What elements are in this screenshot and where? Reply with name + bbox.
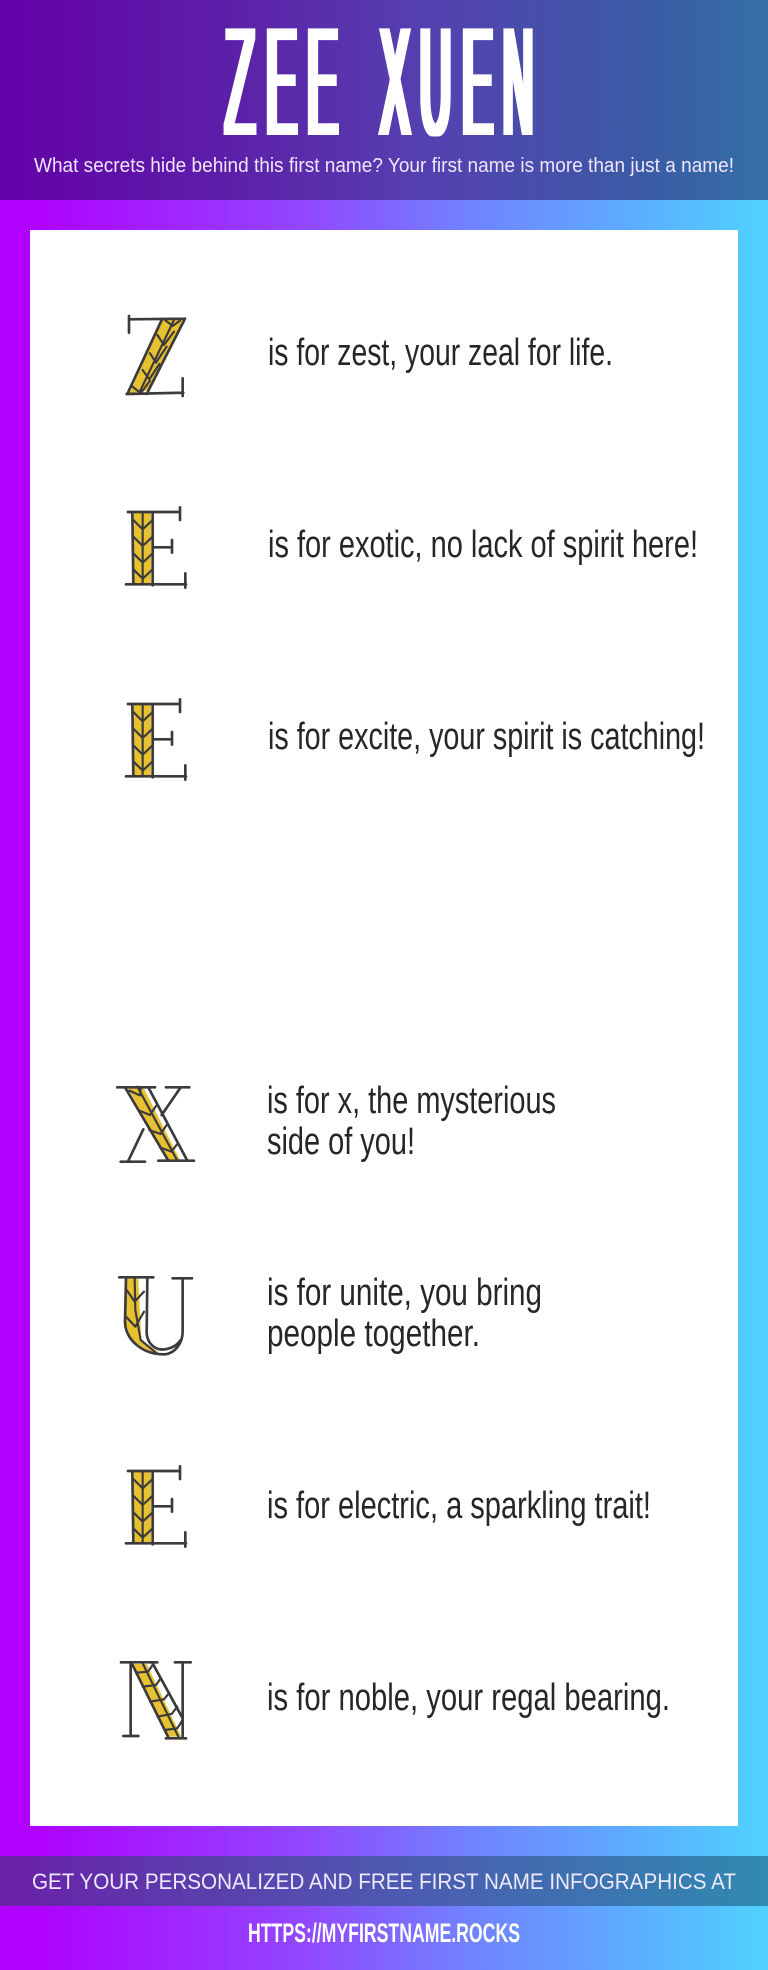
icon: wheat letter E xyxy=(126,699,186,780)
title: E xyxy=(462,0,493,168)
panel: letters card xyxy=(30,230,738,1826)
text: X lines xyxy=(267,1080,556,1163)
title: E xyxy=(266,0,297,168)
text: E line: is for electric, a sparkling trait! xyxy=(267,1485,651,1527)
icon: wheat letter X xyxy=(117,1087,194,1162)
icon: wheat letter U xyxy=(119,1277,192,1354)
url: HTTPS://MYFIRSTNAME.ROCKS xyxy=(248,1918,520,1948)
text: U lines: is for unite, you bring xyxy=(267,1272,542,1314)
icon: wheat letter E xyxy=(126,1466,186,1547)
title: E xyxy=(307,0,338,168)
subtitle: What secrets hide behind this first name? Your first name is more than just a name! xyxy=(34,155,734,177)
footer band xyxy=(0,1856,768,1906)
title: U xyxy=(420,0,451,168)
text: X lines: side of you! xyxy=(267,1121,415,1163)
text: Z line: is for zest, your zeal for life. xyxy=(268,332,613,374)
text: U lines xyxy=(267,1272,542,1355)
footer text: GET YOUR PERSONALIZED AND FREE FIRST NAME INFOGRAPHICS AT xyxy=(32,1869,736,1894)
text: X lines: is for x, the mysterious xyxy=(267,1080,556,1122)
title: X xyxy=(380,0,410,168)
icon: wheat letter Z xyxy=(127,316,185,396)
title: Z xyxy=(225,0,255,168)
text: U lines: people together. xyxy=(267,1313,480,1355)
icon: wheat letter E xyxy=(126,507,186,588)
icon: wheat letter N xyxy=(121,1662,191,1738)
header band: N xyxy=(503,0,533,168)
header band xyxy=(0,0,768,200)
